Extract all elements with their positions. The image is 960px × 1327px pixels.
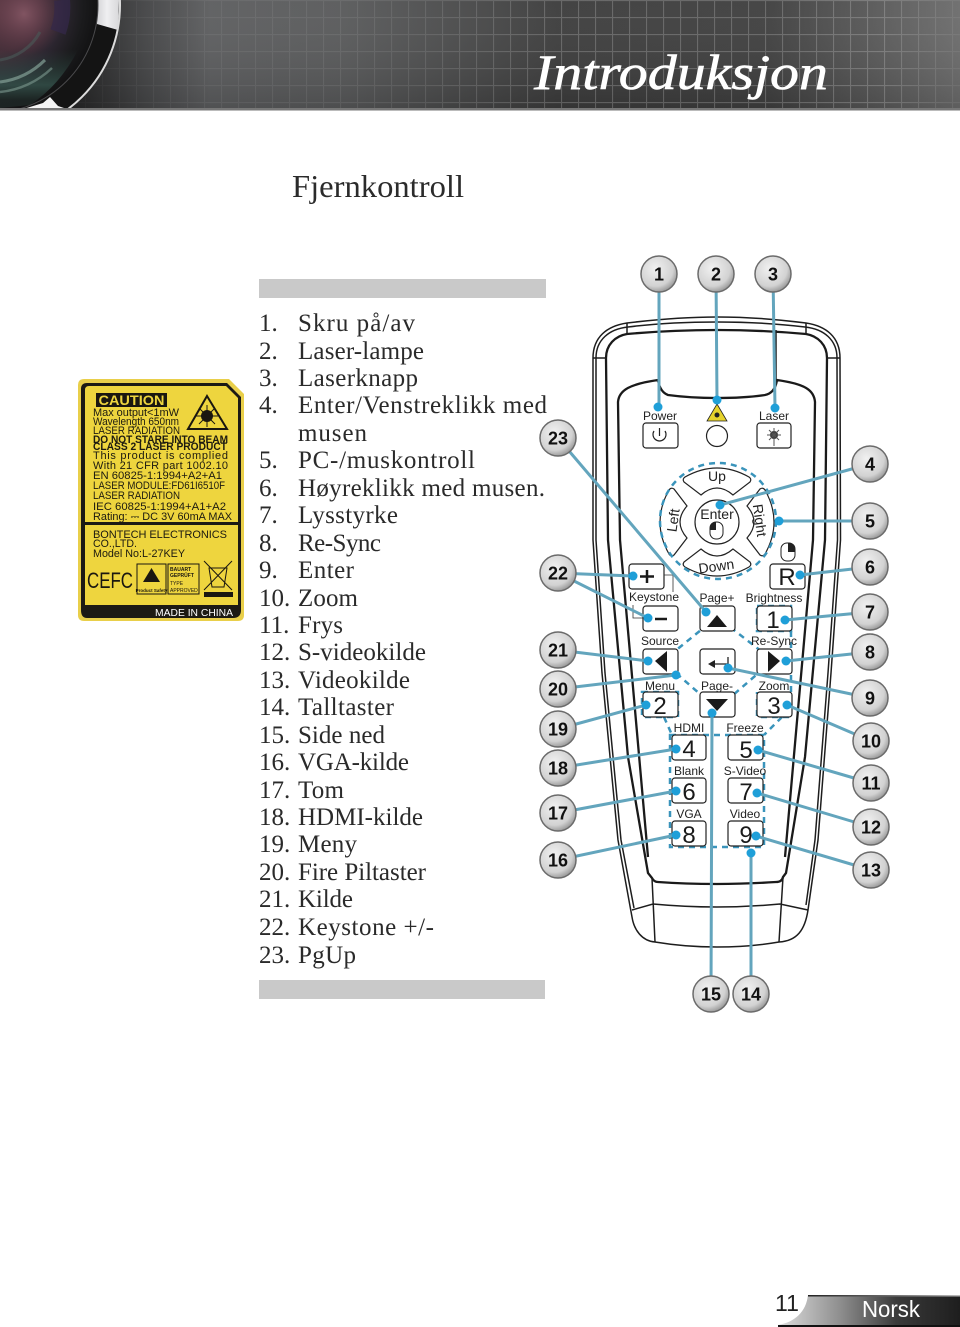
label specification text: EN 60825-1:1994+A2+A1 [93, 470, 222, 482]
keypad buttons: Keystone [629, 590, 679, 604]
header banner [0, 0, 960, 110]
text block: numbered function list: 23. [259, 942, 290, 969]
directional pad: Down [697, 556, 735, 576]
label specification text: LASER MODULE:FD61I6510F [93, 480, 225, 492]
numbered callouts: 1 [654, 264, 664, 284]
directional pad: Left [664, 508, 683, 533]
text block: numbered function list [259, 310, 548, 969]
text block: numbered function list: Videokilde [298, 667, 410, 694]
top button group: power, laser: Laser [759, 409, 789, 423]
keypad buttons: Menu [645, 679, 675, 693]
numbered callouts: 16 [548, 850, 568, 870]
text block: numbered function list: 13. [259, 667, 290, 694]
text block: numbered function list: Side ned [298, 722, 386, 749]
text block: numbered function list: 1. [259, 310, 278, 337]
page number: 11 [775, 1290, 799, 1316]
numbered callouts: 19 [548, 720, 568, 740]
label specification text: CLASS 2 LASER PRODUCT [93, 441, 227, 453]
numbered callouts: 3 [768, 264, 778, 284]
certification marks: TYPE [170, 581, 184, 587]
numbered callouts: 15 [701, 984, 721, 1004]
keypad buttons: 1 [766, 607, 780, 634]
made in china strip: MADE IN CHINA [155, 607, 233, 619]
text block: numbered function list: 12. [259, 639, 290, 666]
leader lines [558, 274, 871, 994]
text block: numbered function list: 22. [259, 914, 290, 941]
numbered callouts: 13 [861, 860, 881, 880]
text block: numbered function list: 20. [259, 859, 290, 886]
text block: numbered function list: Laser-lampe [298, 338, 424, 365]
keypad buttons: Re-Sync [751, 634, 797, 648]
top button group: power, laser [643, 404, 791, 448]
keypad buttons: 3 [767, 693, 781, 720]
numbered callouts: 2 [711, 264, 721, 284]
text block: numbered function list: 9. [259, 557, 278, 584]
label specification text: DO NOT STARE INTO BEAM [93, 434, 228, 446]
text block: numbered function list: 7. [259, 502, 278, 529]
text block: numbered function list: 4. [259, 392, 278, 419]
icon: projector lens [0, 0, 121, 108]
certification marks: APPROVED [170, 588, 198, 594]
label specification text: This product is complied [93, 450, 228, 462]
numbered callouts: 18 [548, 758, 568, 778]
keypad buttons: Zoom [759, 679, 789, 693]
keypad buttons: R [778, 564, 796, 591]
label specification text: IEC 60825-1:1994+A1+A2 [93, 501, 226, 513]
text block: numbered function list: 3. [259, 365, 278, 392]
keypad buttons [629, 564, 805, 849]
heading: Fjernkontroll: Fjernkontroll [292, 168, 464, 204]
text block: numbered function list: Enter [298, 557, 355, 584]
text block: numbered function list: Fire Piltaster [298, 859, 427, 886]
numbered callouts: 9 [865, 688, 875, 708]
keypad buttons: 4 [682, 736, 696, 763]
numbered callouts: 17 [548, 804, 568, 824]
numbered callouts: 7 [865, 602, 875, 622]
numbered callouts: 22 [548, 564, 568, 584]
text block: numbered function list: Frys [298, 612, 343, 639]
keypad buttons: 6 [682, 779, 696, 806]
keypad buttons: 9 [739, 822, 753, 849]
numbered callouts: 21 [548, 640, 568, 660]
numbered callouts: 11 [861, 774, 881, 794]
text block: numbered function list: Skru på/av [298, 310, 416, 337]
remote control [593, 317, 840, 947]
numbered callouts: 5 [865, 512, 875, 532]
directional pad: Enter [700, 506, 734, 522]
text block: numbered function list: Zoom [298, 585, 359, 612]
certification marks [87, 561, 233, 597]
top button group: power, laser: Power [643, 409, 677, 423]
text block: numbered function list: 5. [259, 447, 278, 474]
text block: numbered function list: Keystone +/- [298, 914, 434, 941]
certification marks: BAUART [170, 567, 191, 573]
text block: numbered function list: musen [298, 420, 368, 447]
numbered callouts: 20 [548, 680, 568, 700]
keypad buttons: S-Video [724, 764, 767, 778]
certification marks: GEPRÜFT [170, 572, 194, 579]
label specification text: Rating: ⎓ DC 3V 60mA MAX [93, 511, 233, 523]
label specification text: Max output<1mW [93, 407, 180, 419]
keypad buttons: 7 [739, 779, 753, 806]
bottom grey bar [259, 980, 545, 999]
remote body outline [593, 317, 840, 947]
icon: laser warning triangle [188, 396, 227, 429]
keypad buttons: Freeze [726, 721, 764, 735]
keypad dashed groups [642, 606, 791, 847]
keypad buttons: Blank [674, 764, 705, 778]
text block: numbered function list: PC-/muskontroll [298, 447, 475, 474]
numbered callouts [540, 256, 889, 1012]
numbered callouts: 12 [861, 818, 881, 838]
directional pad: Right [750, 503, 770, 538]
panel: laser caution label [78, 379, 244, 621]
keypad buttons: 8 [682, 822, 696, 849]
text block: numbered function list: 11. [259, 612, 289, 639]
text block: numbered function list: Meny [298, 831, 358, 858]
text block: numbered function list: 8. [259, 530, 278, 557]
keypad buttons: Page- [701, 679, 733, 693]
keypad buttons: Brightness [746, 591, 802, 605]
text block: numbered function list: 2. [259, 338, 278, 365]
text block: numbered function list: 15. [259, 722, 290, 749]
text block: numbered function list: Enter/Venstreklikk med [298, 392, 548, 419]
text block: numbered function list: 19. [259, 831, 290, 858]
text block: numbered function list: 17. [259, 777, 290, 804]
numbered callouts: 10 [861, 732, 881, 752]
text block: numbered function list: 6. [259, 475, 278, 502]
text block: numbered function list: 21. [259, 886, 290, 913]
keypad buttons: 5 [739, 737, 753, 764]
numbered callouts: 23 [548, 428, 568, 448]
keypad buttons: Source [641, 634, 679, 648]
label specification text: BONTECH ELECTRONICS [93, 529, 227, 541]
directional pad [660, 463, 795, 579]
text block: numbered function list: Lysstyrke [298, 502, 398, 529]
numbered callouts: 4 [865, 454, 875, 474]
text block: numbered function list: HDMI-kilde [298, 804, 423, 831]
footer: page number and language tab [775, 1290, 960, 1327]
certification marks: CEFC [87, 568, 133, 593]
keypad buttons: HDMI [674, 721, 704, 735]
numbered callouts: 8 [865, 642, 875, 662]
text block: numbered function list: 18. [259, 804, 290, 831]
text block: numbered function list: VGA-kilde [298, 749, 409, 776]
keypad buttons: 2 [653, 693, 667, 720]
label specification text: LASER RADIATION [93, 490, 180, 502]
language label: Norsk [862, 1296, 920, 1322]
text block: numbered function list: 14. [259, 694, 290, 721]
label specification text: Model No:L-27KEY [93, 548, 186, 560]
keypad buttons: Video [730, 807, 761, 821]
top grey bar [259, 279, 546, 298]
text block: numbered function list: Re-Sync [298, 530, 381, 557]
directional pad: Up [708, 468, 726, 484]
text block: numbered function list: PgUp [298, 942, 356, 969]
label specification text: With 21 CFR part 1002.10 [93, 460, 228, 472]
caution tag: CAUTION [98, 392, 164, 408]
text block: numbered function list: 16. [259, 749, 290, 776]
text block: numbered function list: Kilde [298, 886, 353, 913]
text block: numbered function list: 10. [259, 585, 290, 612]
label specification text: CO.,LTD. [93, 538, 137, 550]
title: Introduksjon: Introduksjon [533, 44, 828, 100]
text block: numbered function list: Talltaster [298, 694, 395, 721]
label specification text: Wavelength 650nm [93, 416, 179, 428]
label specification text: LASER RADIATION [93, 425, 180, 437]
keypad buttons: Page+ [699, 591, 735, 605]
keypad buttons: VGA [676, 807, 702, 821]
certification marks: Product Safety [136, 588, 168, 593]
text block: numbered function list: Laserknapp [298, 365, 418, 392]
label specification text [93, 407, 233, 560]
text block: numbered function list: S-videokilde [298, 639, 426, 666]
numbered callouts: 14 [741, 984, 761, 1004]
numbered callouts: 6 [865, 558, 875, 578]
text block: numbered function list: Tom [298, 777, 345, 804]
text block: numbered function list: Høyreklikk med musen. [298, 475, 545, 502]
